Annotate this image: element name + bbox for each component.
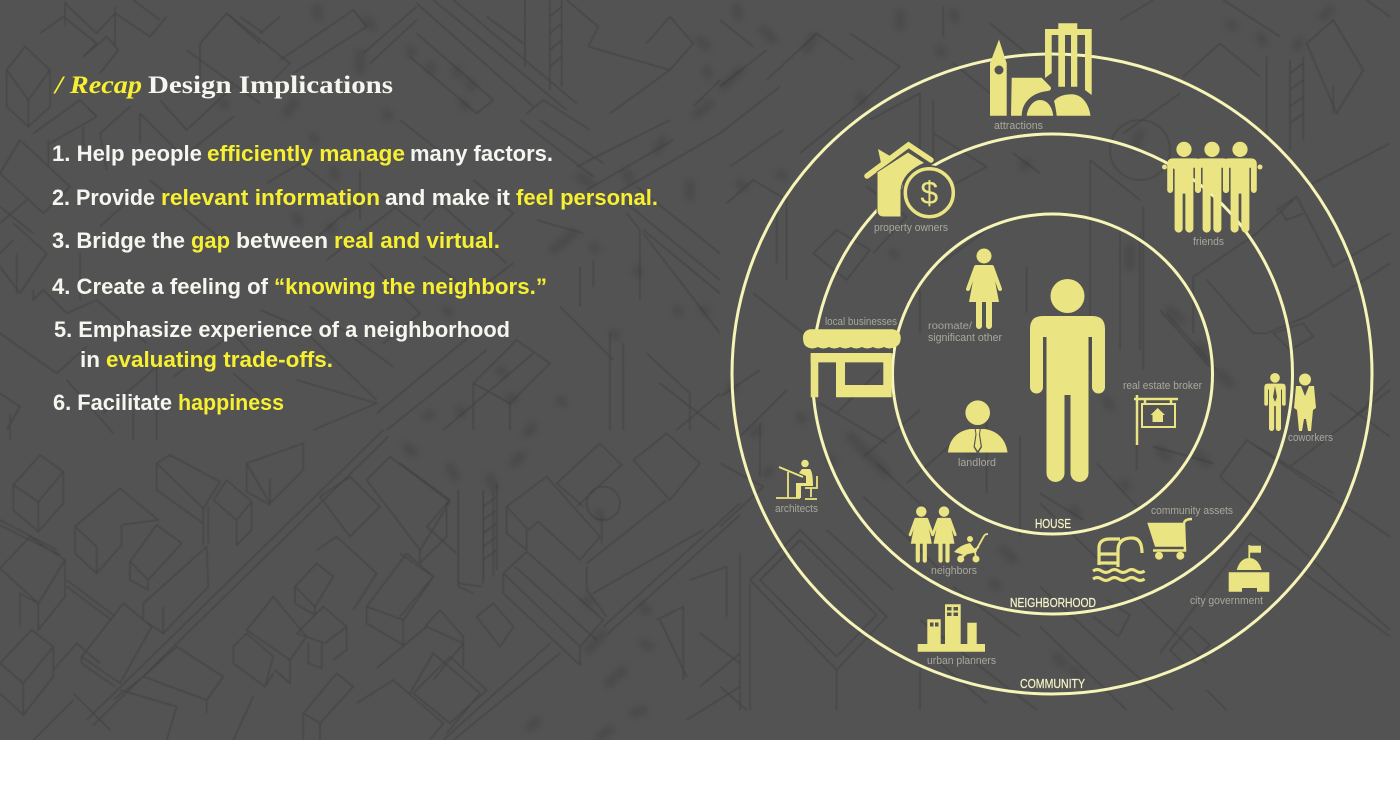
item 3: real and virtual. xyxy=(334,228,500,253)
icon: city government building xyxy=(1229,545,1269,592)
label: roommate xyxy=(928,320,1002,344)
item 2: relevant information xyxy=(161,185,380,210)
label: real estate broker: real estate broker xyxy=(1123,380,1202,392)
item 6: 6. Facilitate xyxy=(53,390,172,415)
title xyxy=(53,72,393,99)
item 1: 1. Help people xyxy=(52,141,202,166)
item 3: gap xyxy=(191,228,230,253)
item 2: feel personal. xyxy=(516,185,658,210)
label: roommate: significant other xyxy=(928,332,1002,344)
ring label: community: COMMUNITY xyxy=(1020,676,1085,691)
icon: friends xyxy=(1162,142,1262,233)
item 2: 2. Provide xyxy=(52,185,155,210)
icon: urban planners skyline xyxy=(918,604,985,652)
white footer band xyxy=(0,740,1400,800)
label: property owners: property owners xyxy=(874,222,948,234)
list: design implications xyxy=(52,141,658,415)
icon: coworkers xyxy=(1264,373,1316,431)
label: community assets: community assets xyxy=(1151,505,1233,517)
icon: community assets cart xyxy=(1147,519,1192,560)
item 1: efficiently manage xyxy=(207,141,405,166)
concentric ring diagram xyxy=(732,23,1372,694)
item 3 xyxy=(52,228,500,253)
item 3: 3. Bridge the xyxy=(52,228,185,253)
item 5: evaluating trade-offs. xyxy=(106,347,333,372)
label: coworkers: coworkers xyxy=(1288,432,1333,444)
icon: landlord xyxy=(948,400,1008,454)
icon: architects drafting xyxy=(776,460,817,499)
label: landlord: landlord xyxy=(958,457,996,469)
ring: house xyxy=(892,214,1212,534)
label: attractions: attractions xyxy=(994,120,1043,132)
item 2: and make it xyxy=(385,185,511,210)
title: Design Implications xyxy=(148,72,393,99)
label: architects: architects xyxy=(775,503,818,515)
item 3: between xyxy=(236,228,328,253)
icon: attractions xyxy=(990,23,1092,116)
item 5: 5. Emphasize experience of a neighborhood xyxy=(54,317,510,342)
ring: community xyxy=(732,54,1372,694)
icon: roommate xyxy=(968,248,1000,329)
icon: local business storefront xyxy=(803,329,901,397)
label: urban planners: urban planners xyxy=(927,655,996,667)
item 4: 4. Create a feeling of xyxy=(52,274,269,299)
item 4 xyxy=(52,274,547,299)
item 5: in xyxy=(80,347,100,372)
item 2 xyxy=(52,185,658,210)
icon: property owners xyxy=(867,145,955,219)
ring: neighborhood xyxy=(812,134,1292,614)
icon: neighbors with stroller xyxy=(910,506,988,563)
label: roommate: roomate/ xyxy=(928,320,972,332)
label: neighbors: neighbors xyxy=(931,565,977,577)
title: / Recap xyxy=(53,72,142,99)
item 1: many factors. xyxy=(410,141,553,166)
item 5 xyxy=(54,317,510,372)
icon: property owners: $ xyxy=(920,175,938,211)
label: friends: friends xyxy=(1193,236,1224,248)
label: city government: city government xyxy=(1190,595,1263,607)
label: local businesses: local businesses xyxy=(825,316,897,328)
icon: real estate sign xyxy=(1134,395,1178,445)
icon: central person xyxy=(1030,279,1105,482)
item 1 xyxy=(52,141,553,166)
icon: swimming pool xyxy=(1093,538,1145,580)
item 6 xyxy=(53,390,284,415)
ring label: neighborhood: NEIGHBORHOOD xyxy=(1010,595,1096,610)
item 4: “knowing the neighbors.” xyxy=(274,274,547,299)
ring label: house: HOUSE xyxy=(1035,516,1071,531)
item 6: happiness xyxy=(178,390,284,415)
